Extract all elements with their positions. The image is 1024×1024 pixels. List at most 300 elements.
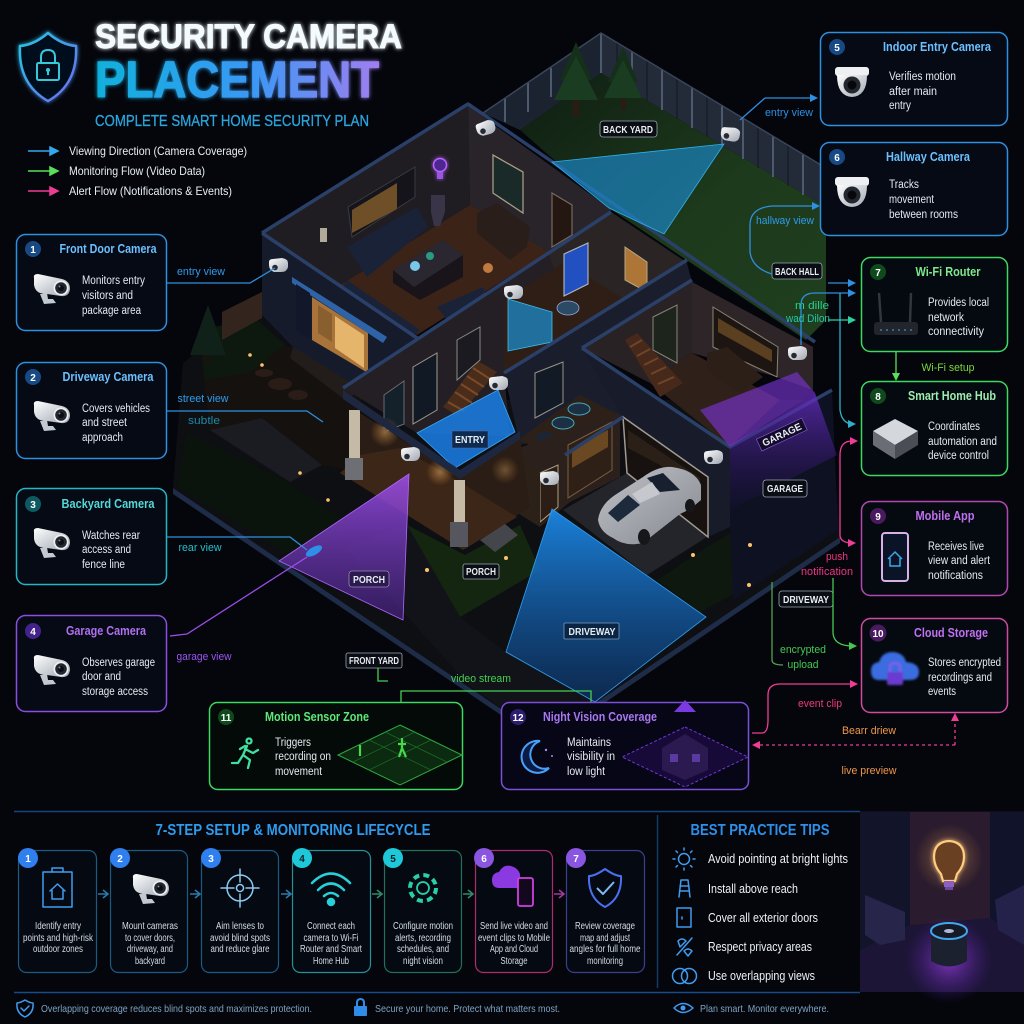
description: between rooms bbox=[889, 209, 958, 221]
place label: entry bbox=[452, 431, 488, 448]
description: storage access bbox=[82, 686, 148, 698]
wall art bbox=[320, 228, 327, 242]
camera: garage room bbox=[788, 346, 807, 360]
garage opening bbox=[623, 417, 708, 537]
label: push notification: push bbox=[826, 551, 848, 563]
number 1: 1 bbox=[30, 245, 36, 256]
label: video stream: video stream bbox=[451, 673, 511, 685]
step 2 icon: camera bbox=[133, 874, 169, 904]
place label: porch: PORCH bbox=[466, 567, 496, 578]
step 6 text bbox=[478, 921, 550, 967]
number 11: 11 bbox=[221, 713, 232, 724]
panel 3: backyard camera bbox=[16, 488, 166, 584]
place label: front yard bbox=[346, 653, 402, 668]
label: push notification: notification bbox=[801, 566, 853, 578]
ground plate bbox=[173, 300, 840, 738]
icon: dome camera bbox=[835, 177, 869, 207]
step 2 text bbox=[122, 921, 178, 967]
step 7 text: map and adjust bbox=[580, 933, 630, 944]
icon: camera bbox=[34, 655, 70, 685]
tip 5 bbox=[672, 968, 815, 984]
step 5 text: alerts, recording bbox=[395, 933, 451, 944]
night diamond bbox=[622, 700, 748, 787]
label: rear view: rear view bbox=[178, 542, 222, 554]
step 1 text: Identify entry bbox=[35, 921, 81, 932]
trees bbox=[190, 42, 642, 364]
step 4 number: 4 bbox=[299, 854, 305, 865]
illustration: lightbulb room bbox=[860, 811, 1024, 1004]
label: green garbled: m dille bbox=[795, 300, 829, 312]
label: clear view: Bearr driew bbox=[842, 725, 896, 737]
pedestal bbox=[431, 195, 445, 226]
smart speaker bbox=[931, 923, 967, 966]
description: low light bbox=[567, 766, 606, 778]
patio table bbox=[255, 369, 308, 400]
place label: front yard: FRONT YARD bbox=[349, 656, 399, 667]
step 3 bbox=[201, 848, 278, 972]
icon: camera bbox=[34, 528, 70, 558]
garage room stairs bbox=[625, 333, 683, 397]
number 3: 3 bbox=[30, 500, 36, 511]
heading: Indoor Entry Camera bbox=[883, 40, 992, 54]
icon: router bbox=[874, 293, 918, 335]
living room back walls bbox=[262, 106, 470, 285]
camera: hallway bbox=[504, 285, 523, 299]
step 1 text: points and high-risk bbox=[23, 933, 94, 944]
driveway camera cone bbox=[506, 509, 706, 702]
footer: overlapping coverage bbox=[17, 1000, 312, 1017]
description bbox=[928, 297, 989, 338]
heading: Cloud Storage bbox=[914, 626, 988, 640]
camera: back yard bbox=[720, 126, 741, 143]
arrow: monitoring flow bbox=[28, 167, 58, 175]
footer: overlapping coverage: Overlapping coverage reduces blind spots and maximizes protection. bbox=[41, 1003, 312, 1015]
heading: Smart Home Hub bbox=[908, 389, 996, 403]
panel 5: indoor entry camera bbox=[820, 32, 1008, 126]
description bbox=[928, 421, 997, 462]
label: encrypted upload bbox=[780, 644, 826, 671]
porch steps bbox=[480, 524, 518, 552]
description bbox=[82, 657, 155, 698]
panel 7: wi-fi router bbox=[862, 258, 1008, 352]
step 7 text: angles for full home bbox=[570, 944, 641, 955]
description: Verifies motion bbox=[889, 71, 956, 83]
step 4 text: Router and Smart bbox=[300, 944, 362, 955]
description bbox=[928, 541, 991, 582]
door back wall bbox=[552, 193, 572, 247]
warm cabinet bbox=[568, 422, 612, 498]
icon: camera bbox=[34, 401, 70, 431]
fence bbox=[483, 33, 826, 207]
description: Monitors entry bbox=[82, 275, 145, 287]
number 11 bbox=[218, 709, 234, 725]
driveway slab bbox=[563, 473, 707, 575]
panel 1: front door camera bbox=[16, 234, 166, 330]
patio bbox=[200, 345, 363, 470]
step 2 text: to cover doors, bbox=[125, 933, 175, 944]
garage room walls and floor bbox=[582, 282, 692, 383]
warm window bbox=[625, 247, 647, 292]
label: encrypted upload: encrypted bbox=[780, 644, 826, 656]
step 6 text: event clips to Mobile bbox=[478, 933, 550, 944]
garage room door bbox=[653, 305, 677, 363]
pavement bbox=[345, 525, 595, 738]
arrow: alert flow bbox=[28, 187, 58, 195]
step 4 text: Home Hub bbox=[313, 956, 349, 967]
side door bbox=[540, 465, 558, 522]
number 12 bbox=[510, 709, 526, 725]
icon: hub bbox=[873, 419, 918, 459]
number 9: 9 bbox=[875, 512, 881, 523]
description: Maintains bbox=[567, 737, 611, 749]
step 6 text: Send live video and bbox=[480, 921, 548, 932]
number 4 bbox=[25, 623, 41, 639]
step 2 text: Mount cameras bbox=[122, 921, 178, 932]
camera: top corner bbox=[475, 119, 497, 137]
description: visibility in bbox=[567, 751, 615, 763]
step 6 icon: cloud and phone bbox=[492, 866, 533, 906]
panel 9: mobile app bbox=[862, 502, 1008, 596]
inner mid windows bbox=[384, 381, 404, 432]
number 5 bbox=[829, 39, 845, 55]
tip 1: Avoid pointing at bright lights bbox=[708, 852, 848, 866]
description: movement bbox=[889, 194, 935, 206]
panel 10: cloud storage bbox=[862, 618, 1008, 712]
center window bbox=[535, 362, 563, 418]
label: garage view: garage view bbox=[176, 651, 232, 663]
label: event clip: event clip bbox=[798, 698, 842, 710]
description: after main bbox=[889, 86, 937, 98]
label: push notification bbox=[801, 551, 853, 578]
sideboard bbox=[477, 203, 530, 260]
sofa bbox=[865, 895, 905, 945]
section divider top bbox=[14, 810, 860, 812]
description: entry bbox=[889, 100, 911, 112]
icon: runner bbox=[232, 738, 258, 768]
tip 4 bbox=[677, 938, 812, 956]
heading: Garage Camera bbox=[66, 624, 147, 638]
blue door bbox=[564, 243, 588, 296]
heading: Night Vision Coverage bbox=[543, 710, 657, 724]
tv bbox=[348, 167, 415, 237]
step 6 text: App and Cloud bbox=[490, 944, 538, 955]
icon: cloud lock bbox=[871, 652, 919, 685]
round devices bbox=[536, 403, 590, 444]
place label: back hall bbox=[772, 263, 822, 279]
window back wall bbox=[493, 155, 523, 213]
description: Receives live bbox=[928, 541, 984, 553]
step 1 icon: clipboard bbox=[43, 868, 72, 907]
description: Coordinates bbox=[928, 421, 980, 433]
place label: porch purple bbox=[349, 571, 389, 587]
step 7 text bbox=[570, 921, 641, 967]
number 1 bbox=[25, 241, 41, 257]
orange figure bbox=[483, 263, 493, 273]
number 10: 10 bbox=[872, 629, 884, 640]
heading: Motion Sensor Zone bbox=[265, 710, 369, 724]
camera: garage bbox=[704, 450, 723, 464]
step 6 text: Storage bbox=[500, 956, 528, 967]
place label: porch bbox=[463, 564, 499, 579]
place label: driveway bbox=[564, 623, 619, 639]
wall caps bbox=[262, 104, 832, 455]
label: hallway view: hallway view bbox=[756, 215, 814, 227]
title bbox=[95, 18, 402, 130]
legend bbox=[28, 144, 247, 198]
step 2 bbox=[110, 848, 188, 972]
description: movement bbox=[275, 766, 323, 778]
number 12: 12 bbox=[512, 713, 524, 724]
description bbox=[567, 737, 615, 778]
place label: back yard bbox=[600, 121, 657, 137]
step 4 icon: wifi bbox=[312, 874, 350, 905]
tip 5: Use overlapping views bbox=[708, 969, 815, 983]
footer: secure your home: Secure your home. Protect what matters most. bbox=[375, 1003, 560, 1015]
step 5 number: 5 bbox=[390, 854, 396, 865]
porch columns bbox=[345, 410, 468, 547]
description bbox=[928, 657, 1001, 698]
plinth below window bbox=[290, 347, 363, 400]
step 7 bbox=[566, 848, 644, 972]
step 7 text: monitoring bbox=[587, 956, 623, 967]
step 3 text: avoid blind spots bbox=[210, 933, 270, 944]
step 4 text: Connect each bbox=[307, 921, 355, 932]
number 10 bbox=[870, 624, 886, 642]
title: PLACEMENT bbox=[95, 51, 379, 108]
place label: garage: GARAGE bbox=[767, 484, 803, 495]
bulb bbox=[915, 824, 983, 892]
blue smudge on porch cone bbox=[304, 543, 324, 559]
center roof deck bbox=[518, 395, 623, 458]
back yard camera cone bbox=[552, 144, 724, 234]
icon: dome camera bbox=[835, 67, 869, 97]
description bbox=[889, 179, 958, 221]
camera: stairs bbox=[489, 376, 508, 390]
place label: driveway: DRIVEWAY bbox=[568, 627, 616, 638]
connector lines: blue and purple bbox=[167, 98, 955, 745]
lower sofas bbox=[342, 280, 487, 336]
number 3 bbox=[25, 496, 41, 512]
description: approach bbox=[82, 432, 123, 444]
garden lights bbox=[248, 353, 752, 587]
panel 6: hallway camera bbox=[820, 142, 1008, 236]
step 6 bbox=[474, 848, 552, 972]
number 7 bbox=[870, 264, 886, 280]
step 3 text: and reduce glare bbox=[210, 944, 270, 955]
icon: moon bbox=[522, 741, 553, 773]
number 2: 2 bbox=[30, 373, 36, 384]
step 5 text: Configure motion bbox=[393, 921, 453, 932]
legend: Viewing Direction (Camera Coverage) bbox=[69, 144, 247, 158]
connector labels bbox=[176, 107, 974, 777]
description: notifications bbox=[928, 570, 983, 582]
heading: Hallway Camera bbox=[886, 150, 971, 164]
title: COMPLETE SMART HOME SECURITY PLAN bbox=[95, 113, 369, 130]
car bbox=[598, 467, 701, 545]
living room big window bbox=[292, 277, 387, 373]
label: street small: subtle bbox=[188, 415, 220, 427]
hallway camera cone bbox=[508, 299, 552, 351]
description: recordings and bbox=[928, 672, 992, 684]
number 6: 6 bbox=[834, 153, 840, 164]
place label: garage upper: GARAGE bbox=[761, 421, 804, 449]
step 1 number: 1 bbox=[25, 854, 31, 865]
description: and street bbox=[82, 417, 128, 429]
description bbox=[275, 737, 331, 778]
description: visitors and bbox=[82, 290, 133, 302]
description: fence line bbox=[82, 559, 125, 571]
shelves bbox=[707, 307, 778, 393]
divider bottom bbox=[14, 992, 860, 994]
panel 2: driveway camera bbox=[16, 362, 166, 458]
divider tips bbox=[656, 815, 658, 988]
step 5 text: schedules, and bbox=[397, 944, 449, 955]
legend: Alert Flow (Notifications & Events) bbox=[69, 184, 232, 198]
table bbox=[393, 240, 463, 300]
entry camera cone bbox=[417, 390, 515, 468]
step 7 text: Review coverage bbox=[575, 921, 635, 932]
porch brown wall end bbox=[518, 455, 540, 527]
description: Watches rear bbox=[82, 530, 140, 542]
number 4: 4 bbox=[30, 627, 36, 638]
title: SECURITY CAMERA bbox=[95, 18, 402, 56]
icon: camera bbox=[34, 274, 70, 304]
description: Tracks bbox=[889, 179, 919, 191]
stairs bbox=[443, 361, 497, 416]
heading: best practice tips: BEST PRACTICE TIPS bbox=[690, 822, 830, 839]
step 3 number: 3 bbox=[208, 854, 214, 865]
place label: driveway right: DRIVEWAY bbox=[783, 595, 829, 606]
tip 3: Cover all exterior doors bbox=[708, 911, 818, 925]
heading: lifecycle: 7-STEP SETUP & MONITORING LIFECYCLE bbox=[156, 822, 430, 839]
heading: Mobile App bbox=[916, 509, 975, 523]
step 2 number: 2 bbox=[117, 854, 123, 865]
front lawn near porch bbox=[407, 525, 540, 617]
step 1 text bbox=[23, 921, 94, 955]
step arrows bbox=[98, 890, 564, 898]
step 4 text bbox=[300, 921, 362, 967]
panel 11: motion sensor zone bbox=[210, 702, 462, 790]
step 5 icon: gear bbox=[410, 875, 436, 901]
isometric house illustration bbox=[173, 33, 840, 744]
label: live preview: live preview bbox=[842, 765, 897, 777]
brown front wall bbox=[513, 413, 620, 527]
place label: porch purple: PORCH bbox=[353, 575, 385, 586]
label: green garbled: wad Dilon bbox=[785, 313, 830, 325]
place label: back hall: BACK HALL bbox=[775, 267, 819, 278]
right lawn bbox=[657, 528, 770, 612]
label: street view: street view bbox=[178, 393, 229, 405]
purple lamp bbox=[434, 158, 446, 179]
description: door and bbox=[82, 671, 121, 683]
panel 4: garage camera bbox=[16, 616, 166, 712]
left fence bbox=[222, 292, 262, 340]
tip 2: Install above reach bbox=[708, 882, 798, 896]
arrow: viewing direction bbox=[28, 147, 58, 155]
step 3 text bbox=[210, 921, 270, 955]
description: network bbox=[928, 312, 964, 324]
porch roof beam bbox=[343, 390, 520, 479]
porch wall bbox=[360, 413, 530, 545]
hub on hallway floor bbox=[557, 301, 579, 315]
tip 3 bbox=[677, 908, 818, 927]
number 5: 5 bbox=[834, 43, 840, 54]
footer: secure your home bbox=[354, 999, 560, 1016]
center wall bbox=[504, 260, 692, 445]
step 5 bbox=[383, 848, 462, 972]
step 1 text: outdoor zones bbox=[33, 944, 83, 955]
description: automation and bbox=[928, 436, 997, 448]
porch floor bbox=[340, 448, 517, 550]
icon: phone bbox=[882, 533, 908, 581]
description: Stores encrypted bbox=[928, 657, 1001, 669]
place label: entry: ENTRY bbox=[455, 435, 485, 446]
label: wi-fi setup: Wi-Fi setup bbox=[922, 362, 974, 374]
step 7 icon: shield check bbox=[589, 869, 621, 907]
description: Provides local bbox=[928, 297, 989, 309]
sofa bbox=[347, 207, 428, 277]
icon: shield logo bbox=[20, 33, 76, 101]
back yard lawn bbox=[520, 73, 826, 340]
description: access and bbox=[82, 544, 131, 556]
description bbox=[82, 403, 150, 444]
step 4 text: camera to Wi-Fi bbox=[304, 933, 358, 944]
motion zone diamond bbox=[338, 725, 462, 785]
legend: Monitoring Flow (Video Data) bbox=[69, 164, 205, 178]
step 5 text bbox=[393, 921, 453, 967]
description bbox=[889, 71, 956, 112]
camera: front door bbox=[269, 258, 288, 272]
living room floor bbox=[340, 205, 548, 335]
tip 1 bbox=[673, 848, 848, 870]
description: Covers vehicles bbox=[82, 403, 150, 415]
arrowheads bbox=[752, 94, 959, 749]
description: events bbox=[928, 686, 956, 698]
step 7 number: 7 bbox=[573, 854, 579, 865]
front yard lawn bbox=[177, 433, 345, 553]
camera: porch bbox=[401, 447, 420, 461]
tip 4: Respect privacy areas bbox=[708, 940, 812, 954]
description: Observes garage bbox=[82, 657, 155, 669]
tips list bbox=[672, 848, 848, 984]
place label: garage bbox=[763, 480, 807, 497]
step 4 bbox=[292, 848, 370, 972]
panel 12: night vision coverage bbox=[502, 700, 748, 790]
heading: Wi-Fi Router bbox=[916, 265, 981, 279]
label: entry view right: entry view bbox=[765, 107, 813, 119]
front yard path bbox=[210, 418, 322, 482]
step 3 icon: crosshair bbox=[221, 869, 259, 907]
step 3 text: Aim lenses to bbox=[216, 921, 264, 932]
number 9 bbox=[870, 508, 886, 524]
heading: Backyard Camera bbox=[62, 497, 155, 511]
description: device control bbox=[928, 450, 989, 462]
camera: driveway bbox=[540, 471, 559, 485]
step 2 text: driveway, and bbox=[127, 944, 173, 955]
description bbox=[82, 530, 140, 571]
number 8: 8 bbox=[875, 392, 881, 403]
garage room camera cone bbox=[730, 393, 837, 510]
label: entry view left: entry view bbox=[177, 266, 225, 278]
panel 8: smart home hub bbox=[862, 382, 1008, 476]
heading: Driveway Camera bbox=[62, 370, 154, 384]
description: package area bbox=[82, 305, 142, 317]
number 7: 7 bbox=[875, 268, 881, 279]
number 8 bbox=[870, 388, 886, 404]
description: view and alert bbox=[928, 555, 991, 567]
heading: Front Door Camera bbox=[60, 242, 157, 256]
porch camera cone bbox=[279, 474, 409, 620]
